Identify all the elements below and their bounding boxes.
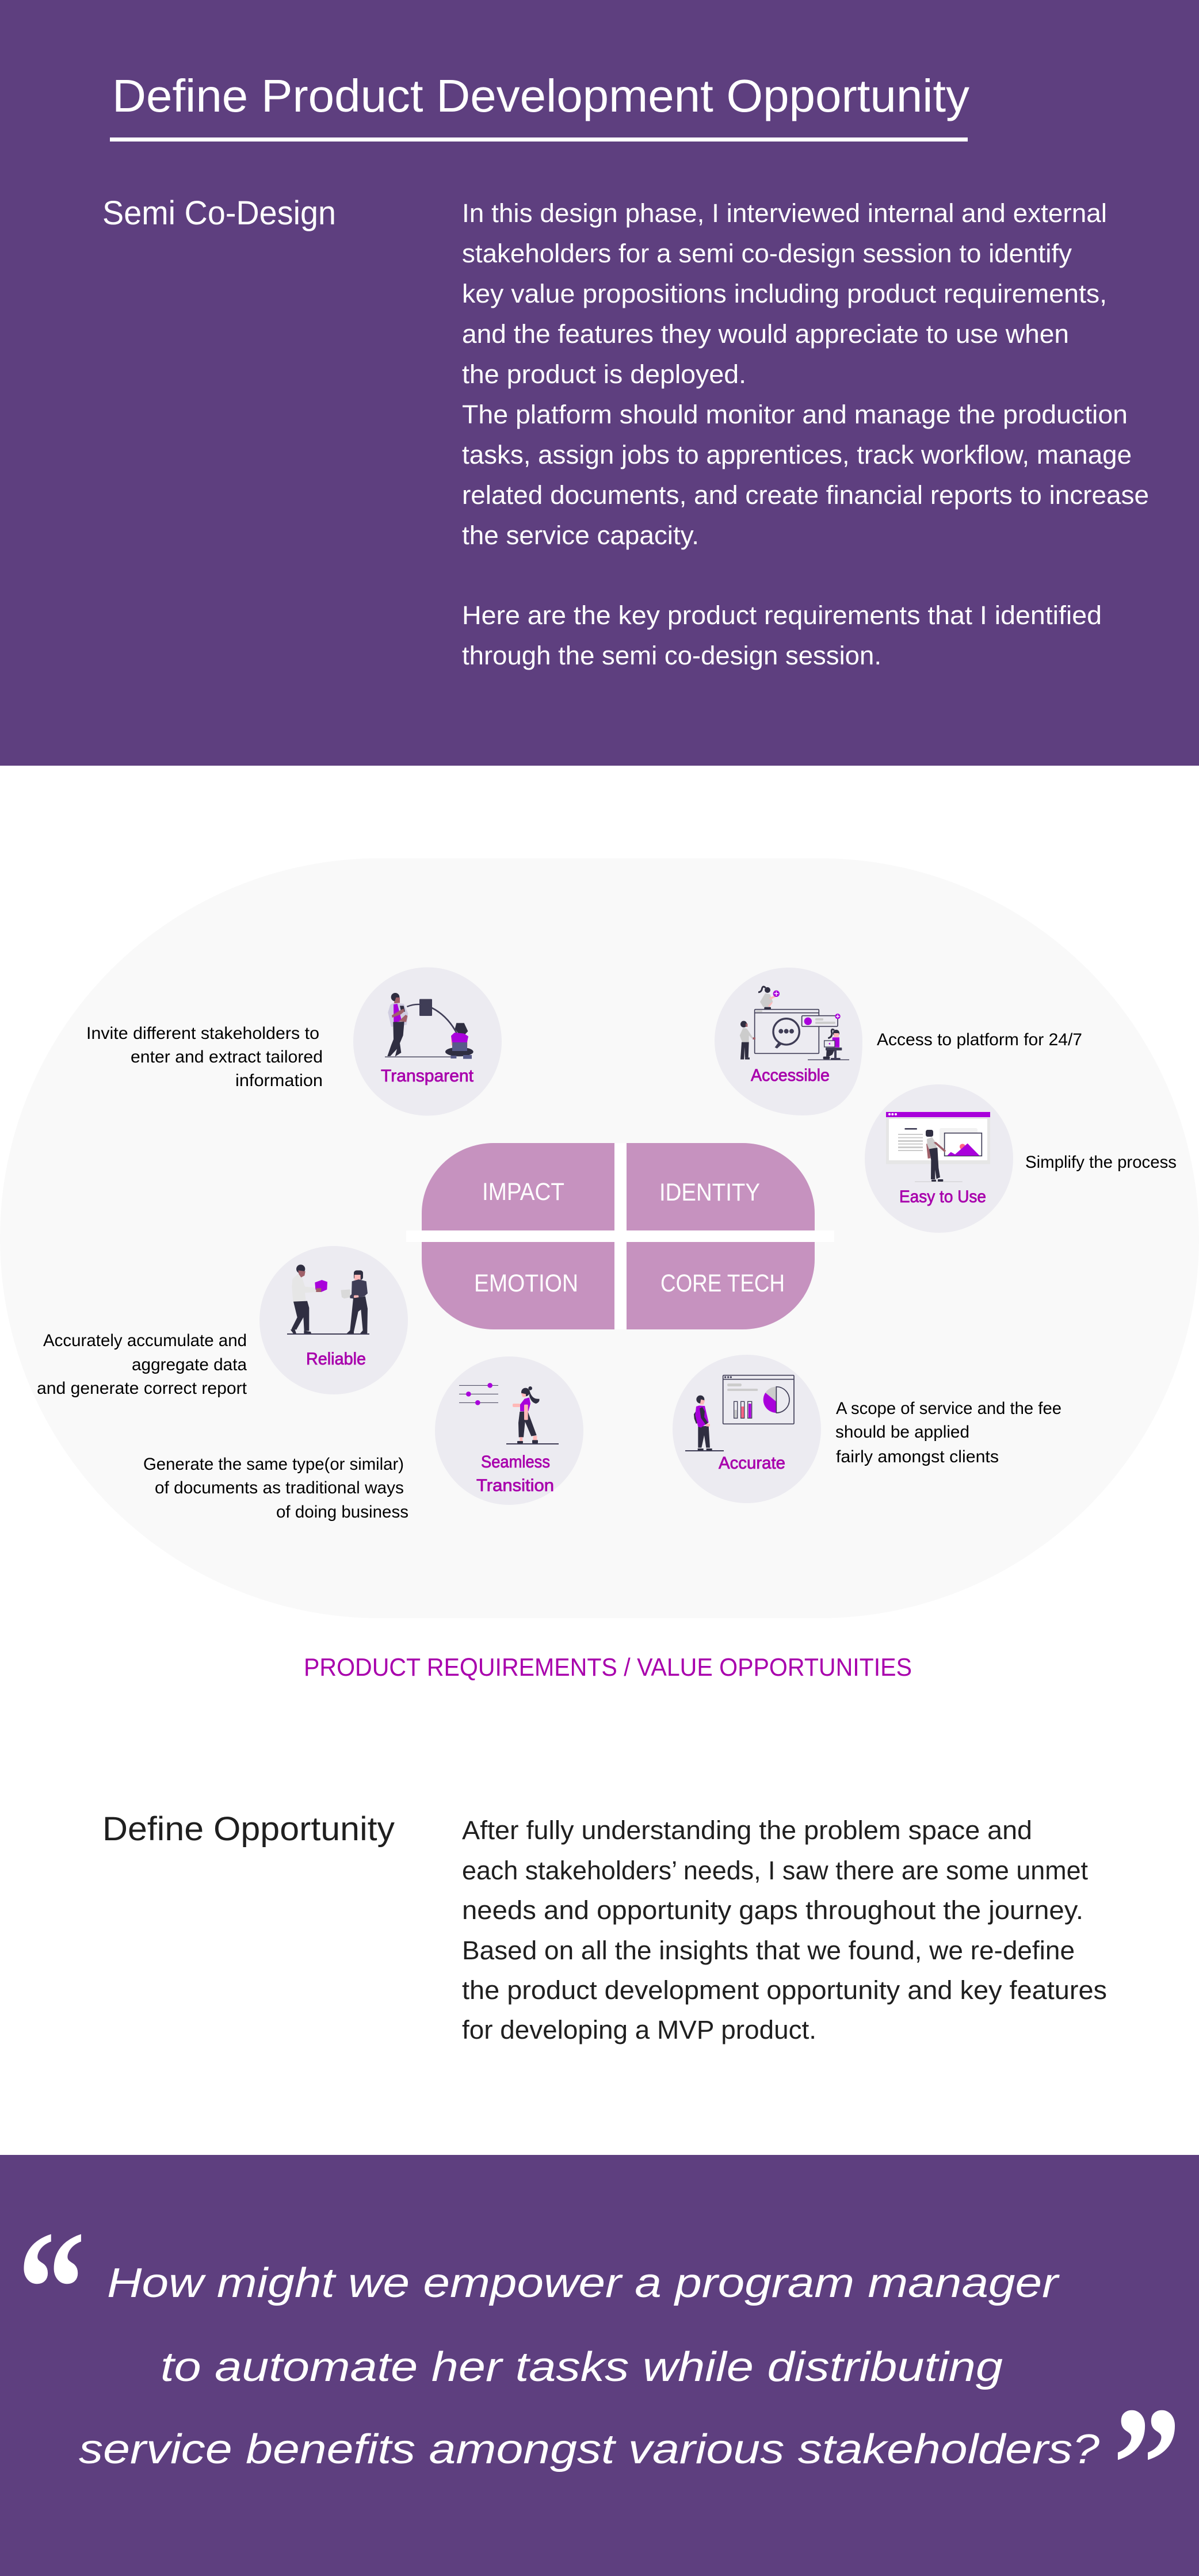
requirement: Reliable	[259, 1246, 408, 1394]
panel: how might we quote	[0, 2155, 1199, 2576]
label	[476, 1453, 554, 1495]
panel: define opportunity	[102, 1810, 1107, 2044]
label: Seamless	[481, 1453, 550, 1472]
text block: semi co-design description: Here are the key product requirements that I identified	[462, 601, 1102, 630]
quote text	[79, 2260, 1099, 2472]
label: Easy to Use	[899, 1187, 986, 1206]
requirement: Transparent	[353, 968, 502, 1116]
quote text: service benefits amongst various stakeholders?	[79, 2426, 1099, 2472]
label: Reliable	[306, 1350, 366, 1369]
description: Accessible: Access to platform for 24/7	[877, 1030, 1082, 1049]
description: Reliable: Accurately accumulate and	[43, 1331, 247, 1350]
requirement: Accessible	[715, 968, 862, 1115]
label: Transparent	[381, 1067, 474, 1086]
description: Accurate: should be applied	[835, 1423, 969, 1442]
description: Reliable: aggregate data	[132, 1355, 247, 1374]
heading: Semi Co-Design: Semi Co-Design	[102, 194, 336, 232]
central value quadrant: EMOTION	[474, 1270, 578, 1297]
text block: semi co-design description: the service capacity.	[462, 521, 699, 550]
description: Accurate	[835, 1399, 1061, 1466]
text block: semi co-design description: The platform should monitor and manage the production	[462, 400, 1128, 429]
text block: semi co-design description: the product is deployed.	[462, 360, 746, 389]
description: Reliable: and generate correct report	[37, 1379, 247, 1398]
text block: define opportunity description: Based on all the insights that we found, we re-define	[462, 1936, 1075, 1965]
text block: semi co-design description: and the features they would appreciate to use when	[462, 319, 1069, 349]
central value quadrant: CORE TECH	[660, 1270, 785, 1297]
requirement: Easy to Use	[865, 1084, 1013, 1233]
icon: person viewing dashboard	[685, 1375, 794, 1451]
text block: semi co-design description	[462, 198, 1149, 670]
text block: define opportunity description: needs and opportunity gaps throughout the journey.	[462, 1895, 1083, 1925]
central value quadrant	[406, 1143, 834, 1329]
text block: define opportunity description: each stakeholders’ needs, I saw there are some unmet	[462, 1856, 1088, 1885]
description: Transparent: information	[235, 1071, 323, 1090]
text block: semi co-design description: In this design phase, I interviewed internal and external	[462, 198, 1107, 228]
text block: semi co-design description: tasks, assign jobs to apprentices, track workflow, manage	[462, 440, 1132, 469]
icon: people sharing document	[385, 993, 474, 1059]
central value quadrant: IDENTITY	[659, 1179, 760, 1206]
label: Transition	[476, 1476, 554, 1495]
description: Transparent: Invite different stakeholders to	[86, 1024, 319, 1043]
requirement: Seamless Transition	[435, 1356, 583, 1505]
icon: two people exchanging boxes	[287, 1264, 369, 1335]
text block: define opportunity description: the product development opportunity and key features	[462, 1975, 1107, 2005]
icon: closing quotation mark: ”	[1113, 2373, 1181, 2555]
icon: woman with sliders	[459, 1383, 559, 1444]
label: Accurate	[719, 1454, 785, 1473]
text block: semi co-design description: related documents, and create financial reports to increase	[462, 480, 1149, 510]
text block: semi co-design description: key value propositions including product requirements,	[462, 279, 1107, 308]
label: Accessible	[751, 1066, 830, 1085]
description: Accurate: A scope of service and the fee	[836, 1399, 1061, 1418]
title: Define Product Development Opportunity	[112, 70, 969, 121]
description: Seamless Transition: of documents as traditional ways	[155, 1478, 404, 1497]
text block: define opportunity description: for developing a MVP product.	[462, 2015, 816, 2044]
description: Seamless Transition: Generate the same type(or similar)	[143, 1455, 404, 1474]
quote text: How might we empower a program manager	[107, 2260, 1060, 2306]
requirement: Accurate	[673, 1355, 821, 1503]
description: Transparent: enter and extract tailored	[131, 1048, 323, 1067]
text block: semi co-design description: stakeholders for a semi co-design session to identify	[462, 239, 1072, 268]
panel: header intro	[0, 0, 1199, 766]
description: Reliable	[37, 1331, 247, 1398]
description: Seamless Transition	[143, 1455, 408, 1522]
description: Transparent	[86, 1024, 323, 1090]
description: Seamless Transition: of doing business	[276, 1503, 408, 1522]
quote text: to automate her tasks while distributing	[161, 2344, 1003, 2390]
caption: product requirements: PRODUCT REQUIREMENTS / VALUE OPPORTUNITIES	[304, 1653, 912, 1681]
text block: define opportunity description	[462, 1816, 1107, 2044]
icon: chat window with people	[740, 987, 849, 1060]
description: Accurate: fairly amongst clients	[836, 1447, 999, 1466]
text block: define opportunity description: After fully understanding the problem space and	[462, 1816, 1032, 1845]
central value quadrant: IMPACT	[482, 1178, 564, 1206]
text block: semi co-design description: through the semi co-design session.	[462, 641, 881, 670]
description: Easy to Use: Simplify the process	[1025, 1153, 1177, 1172]
heading: Define Opportunity: Define Opportunity	[102, 1810, 395, 1848]
panel: product requirements diagram	[0, 858, 1199, 1618]
icon: opening quotation mark: “	[17, 2197, 86, 2379]
icon: web page with person	[886, 1112, 990, 1182]
